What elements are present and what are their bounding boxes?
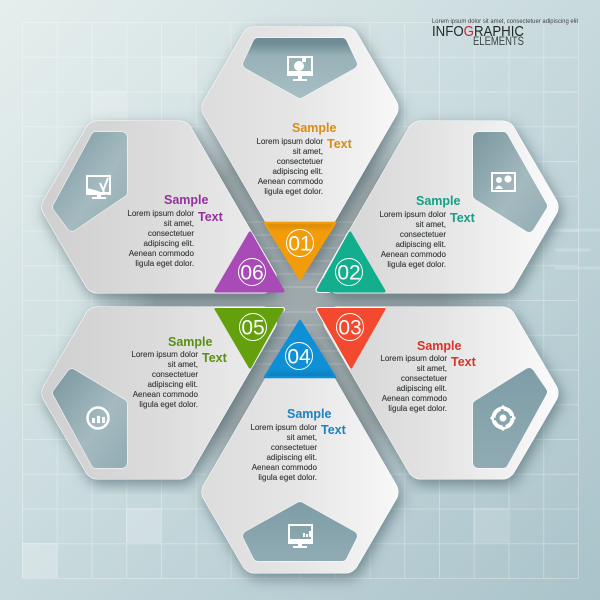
window: 05 (58, 374, 122, 463)
text: 03: consectetuer (401, 374, 447, 383)
window: 04 (248, 507, 352, 556)
text: 03: Sample (417, 339, 462, 353)
icon: chart in circle (88, 408, 108, 428)
text: 02: consectetuer (400, 230, 446, 239)
triangle: 03 (317, 308, 385, 369)
triangle: 02: 02 (337, 262, 361, 284)
text: 04: Sample (287, 407, 332, 421)
icon: cycle arrows (490, 405, 516, 431)
title block: Lorem ipsum dolor sit amet, consectetuer adipiscing elit (432, 18, 578, 25)
text: 03: Lorem ipsum dolor (380, 354, 447, 363)
triangle: 04: 04 (287, 346, 311, 368)
icon: monitor with bars (288, 525, 313, 548)
text: 02: Text (450, 211, 476, 225)
panel: 01 top (216, 41, 384, 253)
window: 01 (248, 43, 352, 93)
text: 02: sit amet, (416, 220, 446, 229)
text: 05: Aenean commodo (133, 390, 199, 399)
text: 01: Lorem ipsum dolor (256, 137, 323, 146)
panel: 03 lower right (338, 321, 544, 465)
title block (432, 18, 578, 48)
text: 04: ligula eget dolor. (258, 473, 317, 482)
window: 02 (478, 137, 542, 227)
window: 06 (58, 137, 122, 226)
central metallic bands (95, 123, 505, 477)
text: 01: Aenean commodo (258, 177, 324, 186)
text: 03: ligula eget dolor. (388, 404, 447, 413)
text: 05: Text (202, 351, 228, 365)
text: 05: ligula eget dolor. (139, 400, 198, 409)
text: 02: adipiscing elit. (395, 240, 446, 249)
text: 03: Text (451, 355, 477, 369)
text: 05: Sample (168, 335, 213, 349)
text: 06: ligula eget dolor. (135, 259, 194, 268)
text: 05: Lorem ipsum dolor (131, 350, 198, 359)
panel: 05 lower left (56, 321, 262, 465)
triangle: 03: 03 (338, 316, 362, 340)
text: 04: Text (321, 423, 347, 437)
text: 05: sit amet, (168, 360, 198, 369)
text: 01: consectetuer (277, 157, 323, 166)
triangle: 01: 01 (288, 232, 312, 256)
text: 01: Text (327, 137, 353, 151)
text: 01: Sample (292, 121, 337, 135)
text: 01: sit amet, (293, 147, 323, 156)
triangle: 02 (316, 230, 384, 292)
text: 06: consectetuer (148, 229, 194, 238)
triangle: 04 (265, 321, 335, 377)
text: 03: adipiscing elit. (396, 384, 447, 393)
panel: 04 bottom (216, 347, 384, 559)
text: 02: Lorem ipsum dolor (379, 210, 446, 219)
text: 02: Aenean commodo (381, 250, 447, 259)
text: 04: Aenean commodo (252, 463, 318, 472)
text: 06: sit amet, (164, 219, 194, 228)
triangle: 05 (215, 308, 284, 367)
icon: monitor with pie (287, 57, 313, 81)
text: 05 (131, 335, 228, 409)
text: 05: consectetuer (152, 370, 198, 379)
title block: INFOGRAPHIC (432, 24, 524, 40)
text: 06: Text (198, 210, 224, 224)
triangle: 05: 05 (241, 316, 265, 340)
icon: monitor with tools (86, 176, 111, 199)
text: 04: adipiscing elit. (266, 453, 317, 462)
text: 01: ligula eget dolor. (264, 187, 323, 196)
text: 02: ligula eget dolor. (387, 260, 446, 269)
text: 01 (256, 121, 353, 196)
text: 05: adipiscing elit. (147, 380, 198, 389)
text: 06: Sample (164, 193, 209, 207)
panel: 02 upper right (338, 135, 544, 279)
text: 04 (250, 407, 347, 482)
text: 01: adipiscing elit. (272, 167, 323, 176)
text: 06 (127, 193, 224, 268)
triangle: 01 (265, 223, 335, 279)
panel: 06 upper left (56, 135, 262, 279)
text: 06: Lorem ipsum dolor (127, 209, 194, 218)
text: 04: Lorem ipsum dolor (250, 423, 317, 432)
text: 06: adipiscing elit. (143, 239, 194, 248)
icon: presentation (492, 173, 515, 191)
text: 06: Aenean commodo (129, 249, 195, 258)
triangle: 06: 06 (240, 262, 264, 284)
text: 03 (380, 339, 477, 413)
text: 03: sit amet, (417, 364, 447, 373)
text: 02: Sample (416, 194, 461, 208)
triangle: 06 (216, 233, 283, 291)
text: 02 (379, 194, 476, 269)
text: 04: sit amet, (287, 433, 317, 442)
title block: ELEMENTS (473, 34, 524, 48)
text: 04: consectetuer (271, 443, 317, 452)
window: 03 (478, 373, 542, 463)
text: 03: Aenean commodo (382, 394, 448, 403)
